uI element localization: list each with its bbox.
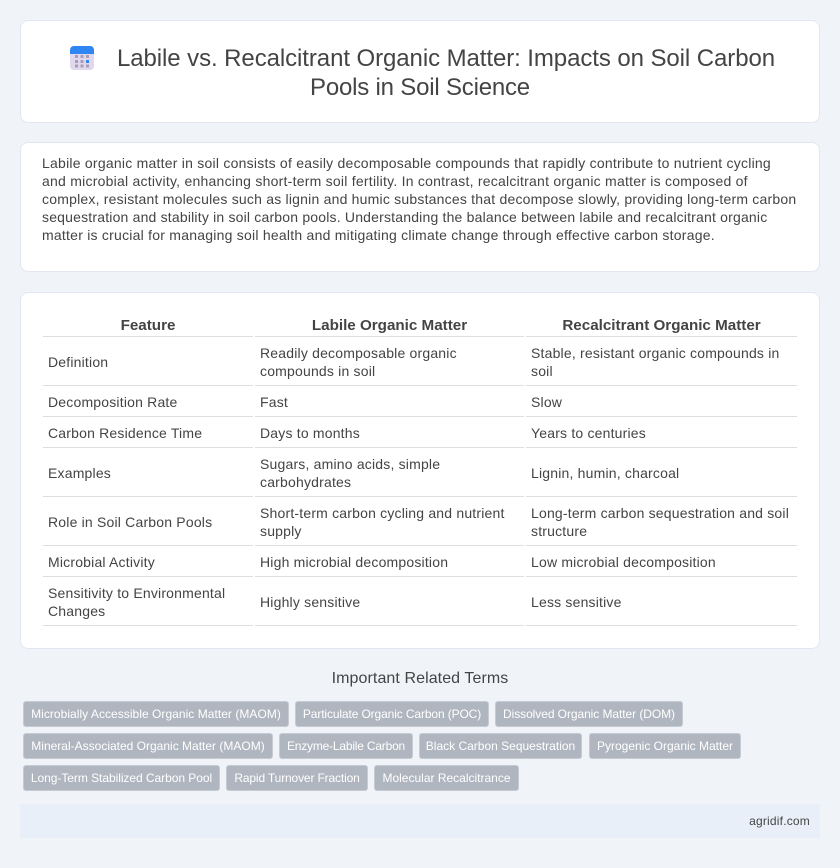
comparison table content: Decomposition Rate: [48, 394, 177, 410]
title: Labile vs. Recalcitrant Organic Matter: Impacts on Soil Carbon: [117, 45, 775, 72]
related term tags: Enzyme-Labile Carbon: [287, 739, 405, 753]
intro paragraph: Labile organic matter in soil consists of easily decomposable compounds that rapidly contribute to nutrient cycling: [42, 155, 771, 171]
related term tags: Particulate Organic Carbon (POC): [303, 707, 481, 721]
related term tags: Black Carbon Sequestration: [426, 739, 575, 753]
intro paragraph: [42, 155, 796, 243]
related term tags: [23, 701, 741, 791]
comparison table content: Definition: [48, 354, 108, 370]
title: Pools in Soil Science: [310, 74, 530, 101]
comparison table content: Readily decomposable organic: [260, 345, 457, 361]
related term tags: Mineral-Associated Organic Matter (MAOM): [31, 739, 265, 753]
footer source text: agridif.com: [749, 814, 810, 828]
comparison table content: structure: [531, 523, 587, 539]
icon: calendar: [70, 46, 94, 70]
comparison table content: Feature: [121, 317, 175, 334]
comparison table content: Days to months: [260, 425, 360, 441]
related term tags: Long-Term Stabilized Carbon Pool: [31, 771, 212, 785]
comparison table content: Role in Soil Carbon Pools: [48, 514, 212, 530]
comparison table content: Carbon Residence Time: [48, 425, 202, 441]
title: [117, 45, 775, 101]
intro paragraph: sequestration and stability in soil carbon pools. Understanding the balance between labile and recalcitrant organic: [42, 209, 767, 225]
comparison table content: soil: [531, 363, 553, 379]
comparison table content: Less sensitive: [531, 594, 622, 610]
intro paragraph: matter is crucial for managing soil health and mitigating climate change through effective carbon storage.: [42, 227, 715, 243]
heading: related terms: Important Related Terms: [332, 670, 508, 687]
comparison table content: Highly sensitive: [260, 594, 360, 610]
comparison table content: Years to centuries: [531, 425, 646, 441]
comparison table content: [43, 317, 797, 626]
comparison table content: Long-term carbon sequestration and soil: [531, 505, 789, 521]
comparison table content: Sensitivity to Environmental: [48, 585, 225, 601]
related term tags: Dissolved Organic Matter (DOM): [503, 707, 675, 721]
related term tags: Rapid Turnover Fraction: [234, 771, 360, 785]
footer bar: [20, 804, 820, 838]
comparison table content: Short-term carbon cycling and nutrient: [260, 505, 505, 521]
panel: comparison table: [20, 292, 820, 649]
panel: intro text: [20, 142, 820, 272]
comparison table content: High microbial decomposition: [260, 554, 448, 570]
related term tags: Microbially Accessible Organic Matter (MAOM): [31, 707, 281, 721]
related term tags: Pyrogenic Organic Matter: [597, 739, 733, 753]
related term tags: Molecular Recalcitrance: [382, 771, 511, 785]
comparison table content: compounds in soil: [260, 363, 375, 379]
comparison table content: Changes: [48, 603, 105, 619]
comparison table content: carbohydrates: [260, 474, 351, 490]
comparison table content: Labile Organic Matter: [312, 317, 467, 334]
comparison table content: Stable, resistant organic compounds in: [531, 345, 779, 361]
comparison table content: supply: [260, 523, 302, 539]
comparison table content: Recalcitrant Organic Matter: [562, 317, 761, 334]
comparison table content: Fast: [260, 394, 288, 410]
intro paragraph: and microbial activity, enhancing short-term soil fertility. In contrast, recalcitrant organic matter is composed of: [42, 173, 748, 189]
intro paragraph: complex, resistant molecules such as lignin and humic substances that decompose slowly, providing long-term carbon: [42, 191, 796, 207]
comparison table content: Lignin, humin, charcoal: [531, 465, 679, 481]
panel: title header: [20, 20, 820, 123]
comparison table content: Sugars, amino acids, simple: [260, 456, 440, 472]
comparison table content: Microbial Activity: [48, 554, 155, 570]
comparison table content: Low microbial decomposition: [531, 554, 716, 570]
comparison table content: Examples: [48, 465, 111, 481]
comparison table content: Slow: [531, 394, 562, 410]
